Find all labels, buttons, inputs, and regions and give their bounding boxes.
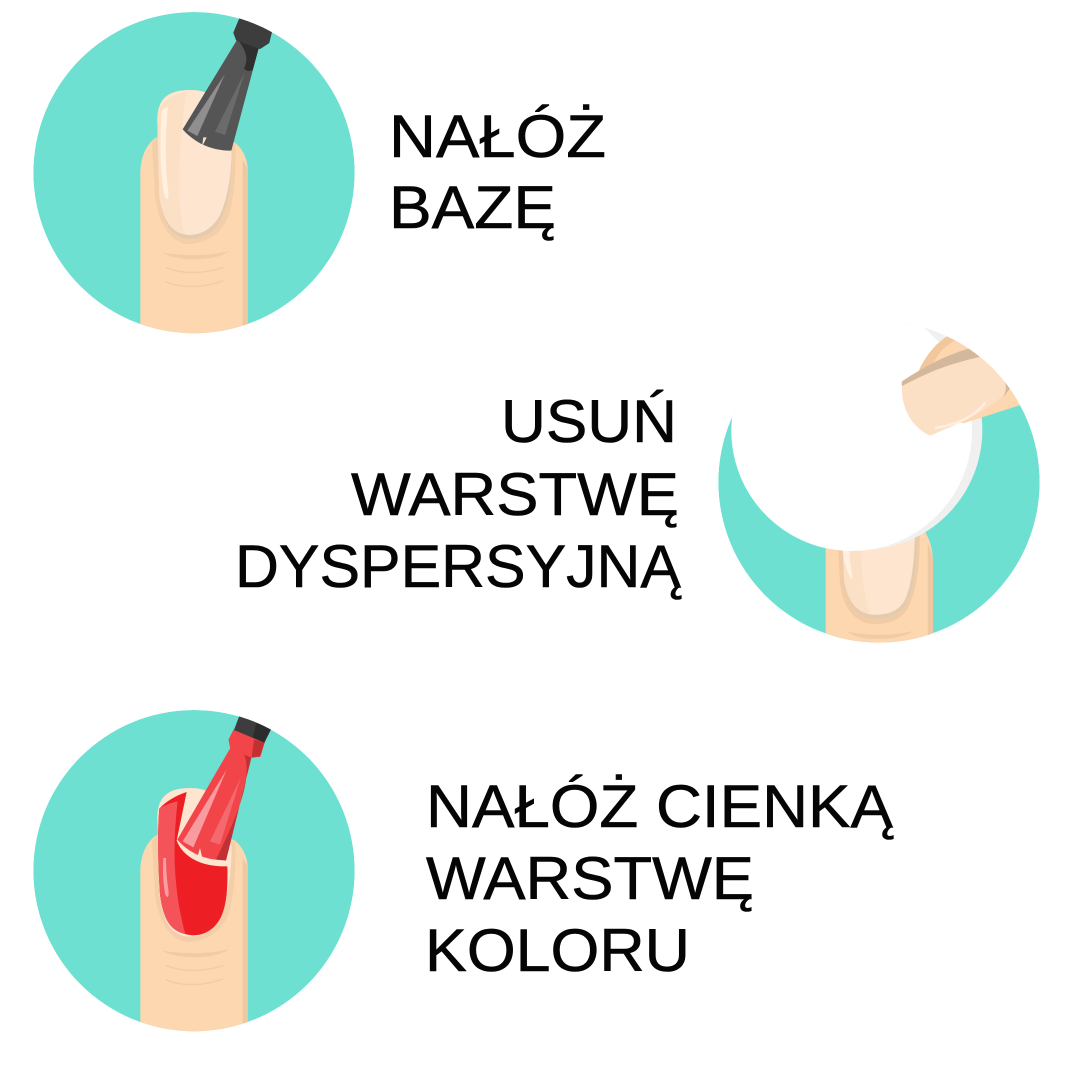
heading: step 2: WARSTWĘ (351, 461, 679, 528)
heading: step 3: KOLORU (425, 917, 690, 984)
heading: step 3: NAŁÓŻ CIENKĄ (426, 773, 894, 840)
heading: step 2: DYSPERSYJNĄ (235, 533, 682, 600)
finger wrinkles (162, 950, 228, 957)
heading: step 1: BAZĘ (389, 174, 556, 241)
cotton pad (925, 328, 948, 340)
heading: step 1 (389, 103, 606, 241)
heading: step 1: NAŁÓŻ (389, 103, 606, 170)
red nail polish (158, 792, 227, 935)
brush bristles (177, 747, 252, 860)
finger wrinkles (162, 252, 228, 259)
heading: step 2 (235, 388, 682, 600)
icon: finger with base coat brush (33, 12, 355, 337)
brush bristles (183, 39, 259, 151)
heading: step 3 (425, 773, 894, 984)
icon: finger with red polish brush (33, 710, 355, 1035)
heading: step 3: WARSTWĘ (426, 845, 754, 912)
icon: finger with cotton pad (710, 310, 1043, 647)
heading: step 2: USUŃ (501, 388, 677, 455)
thumb (919, 337, 1020, 424)
